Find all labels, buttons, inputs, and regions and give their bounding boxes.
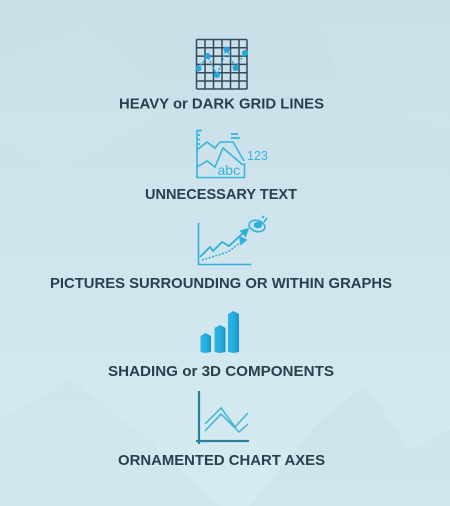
heading: shading or 3D components: SHADING or 3D COMPONENTS	[108, 363, 334, 380]
icon: chart with unnecessary text	[197, 130, 268, 178]
heading: pictures surrounding or within graphs: PICTURES SURROUNDING OR WITHIN GRAPHS	[50, 275, 392, 292]
heading: ornamented chart axes: ORNAMENTED CHART AXES	[118, 452, 325, 469]
heading: unnecessary text: UNNECESSARY TEXT	[145, 186, 297, 203]
icon: 3D bar chart	[200, 311, 239, 353]
heading: heavy or dark grid lines: HEAVY or DARK GRID LINES	[119, 96, 324, 112]
icon: chart with unnecessary text: abc	[218, 162, 240, 178]
icon: heavy grid chart	[196, 40, 248, 89]
icon: chart with picture	[198, 216, 267, 264]
icon: chart with unnecessary text: 123	[247, 149, 268, 163]
icon: ornamented chart axes	[196, 391, 249, 444]
